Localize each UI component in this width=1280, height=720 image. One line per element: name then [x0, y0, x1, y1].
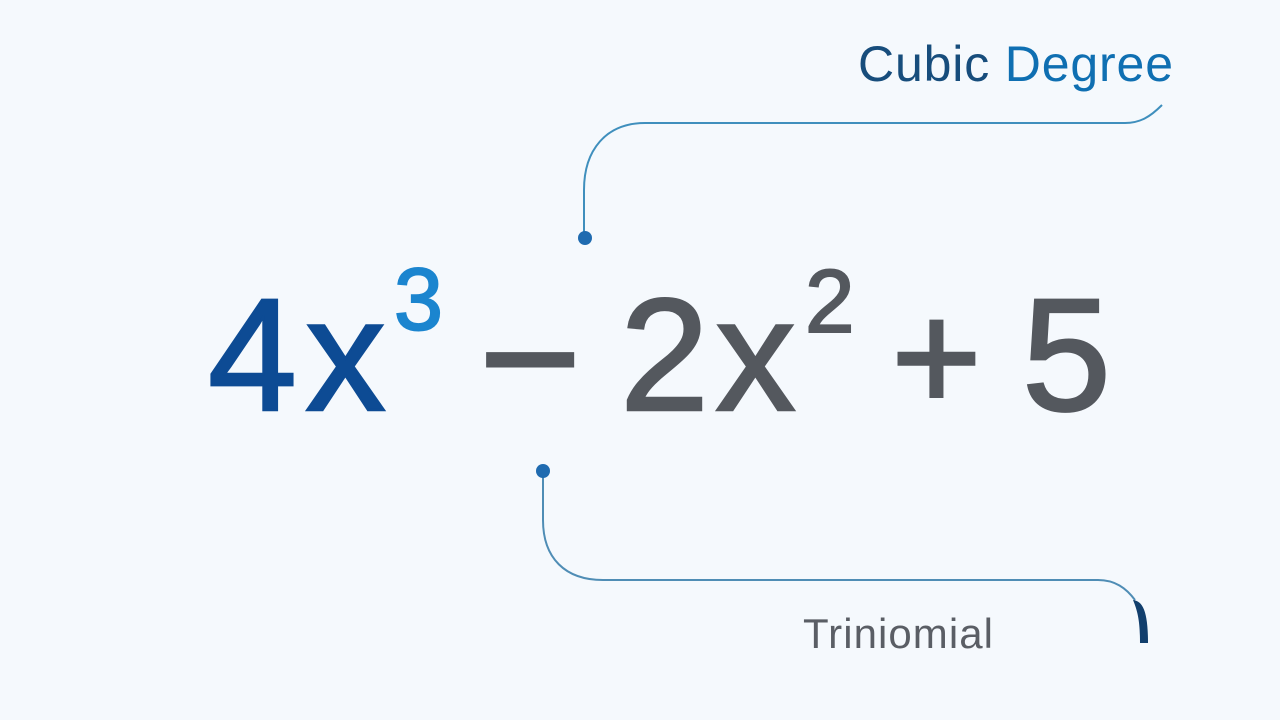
- equation: 4x³ − 2x² + 5: [208, 250, 1111, 456]
- label: Triniomial: Triniomial: [803, 610, 993, 657]
- leading coefficient 4: 4: [208, 265, 297, 444]
- variable x (blue): x: [306, 265, 386, 444]
- connector: cubic degree callout: [578, 105, 1162, 245]
- constant 5: 5: [1022, 265, 1111, 444]
- label: Cubic Degree: Cubic Degree: [858, 36, 1173, 92]
- coefficient 2: 2: [620, 265, 709, 444]
- variable x (grey): x: [716, 265, 796, 444]
- minus sign: −: [479, 261, 581, 456]
- connector: trinomial callout: [536, 464, 1148, 643]
- exponent 3: 3: [394, 250, 443, 348]
- plus sign: +: [892, 271, 981, 443]
- exponent 2: 2: [805, 251, 854, 351]
